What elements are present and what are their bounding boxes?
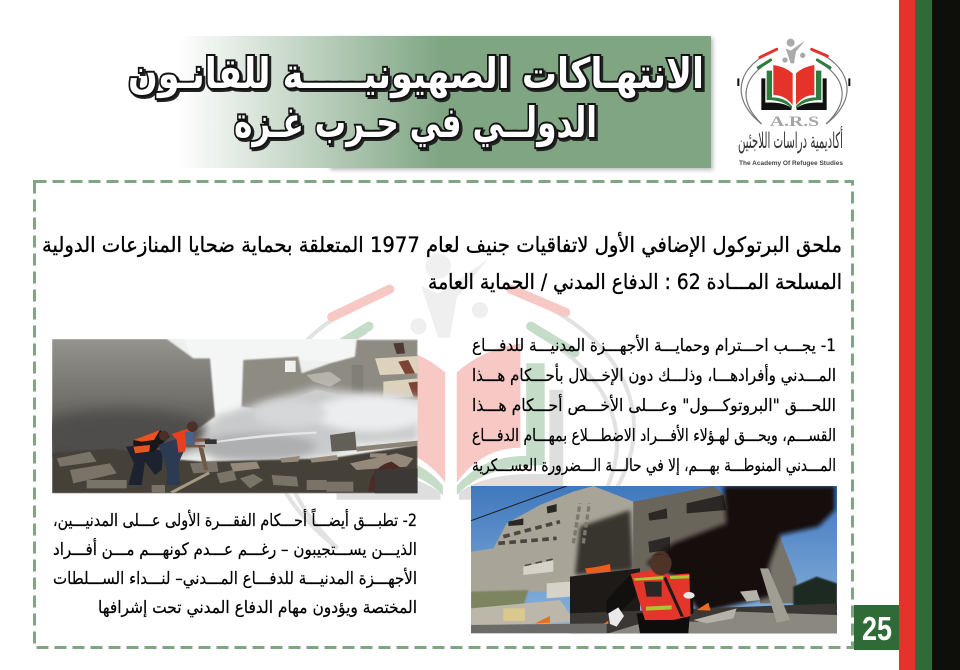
paragraph 2: 2- تطبـــق أيضـــاً أحـــكام الفقـــرة الأولى عـــلى المدنيـــين،: [53, 507, 417, 531]
side stripes: red, green, black: [899, 0, 960, 670]
rubble blocks: [57, 452, 353, 493]
dashed content frame: [34, 182, 852, 648]
logo emblem: [738, 39, 849, 124]
paragraph 1: القســـم، ويحـــق لهـؤلاء الأفـــراد الاضطـــلاع بمهـــام الدفـــاع: [472, 425, 836, 446]
middle building: [633, 486, 737, 573]
paragraph 1: المـــدني وأفرادهـــا، وذلـــك دون الإخـــلال بأحـــكام هـــذا: [472, 363, 836, 386]
watermark: academy logo: [266, 253, 634, 548]
paragraph 1: المـــدني المنوطـــة بهـــم، إلا في حالـــة الـــضرورة العســـكرية: [472, 456, 836, 476]
logo: Academy of Refugee Studies: [738, 39, 849, 167]
left building: [471, 486, 633, 593]
logo: Academy of Refugee Studies: أكاديمية دراسات اللاجئين: [738, 126, 843, 154]
firefighter figures: [126, 421, 217, 493]
heading line 2: المسلحة المـــادة 62 : الدفاع المدني / الحماية العامة: [428, 270, 842, 294]
logo English name: The Academy Of Refugee Studies: [739, 160, 843, 167]
ground and rubble: [570, 603, 837, 633]
right wing: [760, 530, 797, 603]
page number badge: [854, 605, 899, 650]
paragraph 1: 1- يجـــب احـــترام وحمايـــة الأجهـــزة المدنيـــة للدفـــاع: [472, 335, 836, 356]
title line 2: الدولــي في حـرب غـزة: [234, 98, 597, 148]
photo: medic before burning building: [471, 486, 837, 633]
medic figure: [607, 551, 695, 633]
paragraph 2: [53, 507, 417, 618]
logo initials: A.R.S: [770, 114, 819, 130]
heading text: [42, 232, 842, 294]
title line 1: الانتهـاكات الصهيونيـــــة للقانـون: [128, 49, 704, 99]
paragraph 1: [472, 335, 836, 476]
photo: firefighters in smoke and rubble: [37, 339, 427, 493]
heading line 1: ملحق البرتوكول الإضافي الأول لاتفاقيات جنيف لعام 1977 المتعلقة بحماية ضحايا المنازعات الدولية: [42, 232, 842, 257]
paragraph 2: الأجهـــزة المدنيـــة للدفـــاع المـــدني– لنـــداء الســـلطات: [53, 568, 417, 589]
title banner: [128, 36, 713, 170]
paragraph 2: الذيـــن يســـتجيبون – رغـــم عـــدم كونهـــم مـــن أفـــراد: [53, 538, 417, 560]
page number badge: 25: [862, 610, 892, 647]
paragraph 1: اللحـــق "البروتوكـــول" وعـــلى الأخـــص أحـــكام هـــذا: [472, 394, 836, 416]
black smoke: [647, 486, 835, 613]
paragraph 2: المختصة ويؤدون مهام الدفاع المدني تحت إشرافها: [98, 598, 417, 618]
